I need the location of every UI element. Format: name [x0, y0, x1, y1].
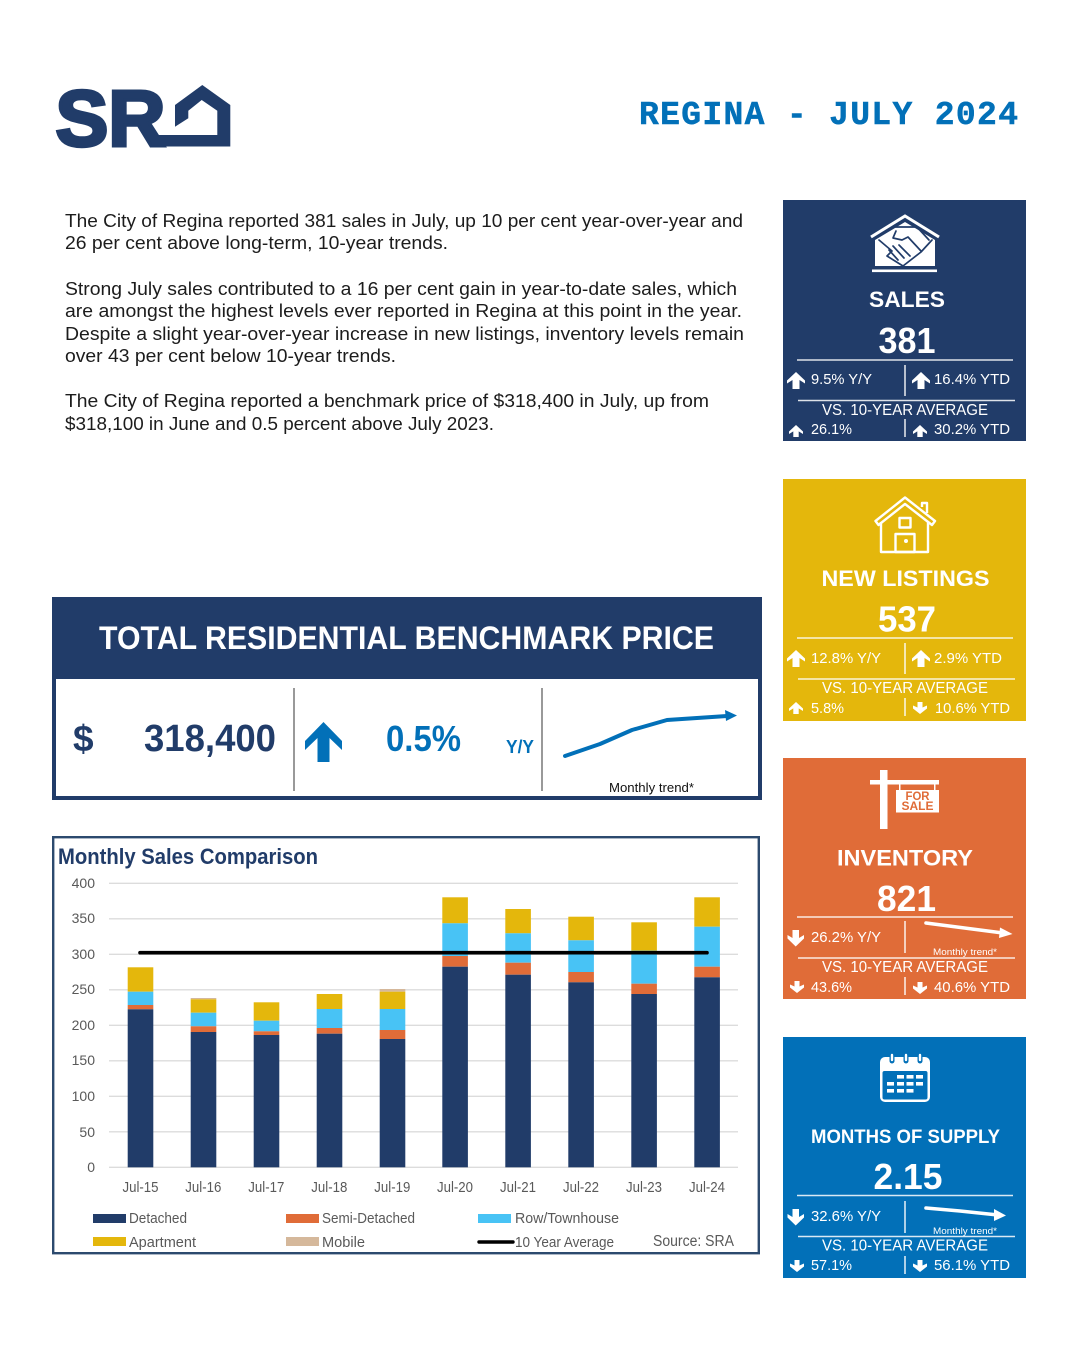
bar: Jul-15 — [128, 967, 153, 1167]
legend: Apartment — [129, 1234, 197, 1251]
bar: Jul-21 — [505, 909, 531, 1167]
heading: benchmark price: TOTAL RESIDENTIAL BENCHMARK PRICE — [99, 620, 714, 656]
stats: new listings: 12.8% Y/Y — [811, 650, 881, 667]
y axis labels: 250 — [72, 981, 95, 997]
text block: market summary: Despite a slight year-over-year increase in new listings, inventory levels remain — [65, 323, 744, 344]
bar: Jul-16 — [191, 998, 216, 1167]
stats: new listings: 10.6% YTD — [935, 700, 1010, 717]
stats: sales: 16.4% YTD — [934, 371, 1010, 388]
panel: total residential benchmark price — [52, 597, 762, 798]
icon: up arrow — [305, 722, 342, 762]
stats: new listings — [787, 566, 1015, 717]
source note: Source: SRA — [653, 1233, 735, 1250]
year-over-year change — [386, 718, 534, 759]
y axis labels: 200 — [72, 1017, 95, 1033]
x axis labels — [122, 1180, 725, 1196]
stats: sales: 9.5% Y/Y — [811, 371, 872, 388]
y axis labels: 0 — [87, 1159, 95, 1175]
bar: Jul-24 — [694, 897, 720, 1167]
panel: inventory — [783, 758, 1026, 999]
y axis labels: 300 — [72, 946, 95, 962]
stacked bars — [128, 897, 720, 1167]
x axis labels: Jul-24 — [689, 1180, 725, 1196]
stats: inventory: INVENTORY — [837, 846, 973, 870]
logo: SRA — [56, 74, 230, 162]
x axis labels: Jul-19 — [374, 1180, 410, 1196]
icon: for sale sign: FOR — [906, 789, 930, 803]
stats: months of supply: 2.15 — [874, 1156, 942, 1197]
x axis labels: Jul-16 — [185, 1180, 221, 1196]
monthly trend arrow: Monthly trend* — [933, 1226, 998, 1236]
y axis labels: 400 — [72, 875, 95, 891]
stats: inventory — [788, 846, 1015, 996]
text block: market summary: are amongst the highest levels ever reported in Regina at this point in the year. — [65, 300, 742, 321]
x axis labels: Jul-21 — [500, 1180, 536, 1196]
year-over-year change: 0.5% — [386, 718, 461, 759]
y axis labels: 50 — [79, 1124, 95, 1140]
logo: SRA: SR — [56, 74, 166, 162]
legend: Semi-Detached — [322, 1210, 415, 1227]
stats: inventory: VS. 10-YEAR AVERAGE — [822, 959, 988, 976]
panel: monthly sales comparison chart — [53, 837, 759, 1253]
title: Regina - July 2024: REGINA - JULY 2024 — [639, 97, 1018, 134]
text block: market summary — [65, 210, 744, 434]
10 year average line — [140, 951, 707, 955]
monthly trend arrow — [926, 1208, 1006, 1236]
monthly trend line — [565, 710, 737, 795]
price value: $ — [73, 718, 94, 759]
icon: for sale sign: SALE — [902, 799, 934, 813]
icon: for sale sign — [870, 770, 939, 829]
stats: months of supply — [788, 1127, 1015, 1274]
stats: sales — [787, 287, 1015, 438]
text block: market summary: The City of Regina reported a benchmark price of $318,400 in July, up from — [65, 390, 709, 411]
stats: sales: SALES — [869, 287, 945, 312]
stats: months of supply: MONTHS OF SUPPLY — [811, 1127, 1000, 1148]
stats: sales: VS. 10-YEAR AVERAGE — [822, 402, 988, 419]
legend: Detached — [129, 1210, 187, 1227]
stats: sales: 381 — [878, 320, 936, 361]
chart heading: Monthly Sales Comparison — [58, 844, 318, 869]
icon: house — [876, 498, 935, 552]
y axis labels — [72, 875, 95, 1175]
text block: market summary: Strong July sales contributed to a 16 per cent gain in year-to-date sales, which — [65, 278, 737, 299]
x axis labels: Jul-17 — [248, 1180, 284, 1196]
bar: Jul-20 — [442, 897, 468, 1167]
stats: inventory: 43.6% — [811, 979, 852, 996]
monthly trend arrow: Monthly trend* — [933, 947, 998, 957]
monthly trend arrow — [926, 923, 1012, 957]
panel: new listings — [783, 479, 1026, 721]
icon: handshake house — [871, 216, 939, 272]
price value — [73, 718, 276, 760]
bar: Jul-23 — [631, 922, 657, 1167]
bar: Jul-22 — [568, 917, 594, 1167]
stats: new listings: VS. 10-YEAR AVERAGE — [822, 680, 988, 697]
x axis labels: Jul-15 — [122, 1180, 158, 1196]
stats: inventory: 821 — [877, 878, 936, 919]
legend: 10 Year Average — [515, 1234, 614, 1251]
bar: Jul-17 — [254, 1002, 279, 1167]
panel: sales — [783, 200, 1026, 441]
text block: market summary: The City of Regina reported 381 sales in July, up 10 per cent year-over-year and — [65, 210, 743, 231]
x axis labels: Jul-23 — [626, 1180, 662, 1196]
stats: months of supply: 56.1% YTD — [934, 1257, 1010, 1274]
bar: Jul-19 — [380, 989, 405, 1167]
stats: sales: 30.2% YTD — [934, 421, 1010, 438]
bar: Jul-18 — [317, 994, 342, 1167]
panel: months of supply — [783, 1037, 1026, 1278]
price value: 318,400 — [144, 718, 276, 760]
stats: months of supply: VS. 10-YEAR AVERAGE — [822, 1238, 988, 1254]
x axis labels: Jul-22 — [563, 1180, 599, 1196]
stats: new listings: 2.9% YTD — [934, 650, 1002, 667]
stats: inventory: 26.2% Y/Y — [811, 929, 881, 946]
legend: Row/Townhouse — [515, 1210, 619, 1227]
legend — [93, 1210, 619, 1251]
stats: new listings: 5.8% — [811, 700, 844, 717]
stats: inventory: 40.6% YTD — [934, 979, 1010, 996]
y axis labels: 100 — [72, 1088, 95, 1104]
stats: new listings: NEW LISTINGS — [822, 566, 990, 591]
text block: market summary: 26 per cent above long-term, 10-year trends. — [65, 232, 448, 253]
x axis labels: Jul-20 — [437, 1180, 473, 1196]
icon: calendar — [880, 1055, 930, 1102]
x axis labels: Jul-18 — [311, 1180, 347, 1196]
stats: new listings: 537 — [878, 598, 936, 640]
year-over-year change: Y/Y — [506, 737, 534, 757]
text block: market summary: $318,100 in June and 0.5 percent above July 2023. — [65, 413, 494, 434]
monthly trend line: Monthly trend* — [609, 780, 694, 795]
y axis labels: 350 — [72, 910, 95, 926]
stats: months of supply: 32.6% Y/Y — [811, 1208, 881, 1225]
y axis labels: 150 — [72, 1052, 95, 1068]
legend: Mobile — [322, 1234, 365, 1251]
text block: market summary: over 43 per cent below 10-year trends. — [65, 345, 396, 366]
stats: sales: 26.1% — [811, 421, 852, 438]
stats: months of supply: 57.1% — [811, 1257, 852, 1274]
